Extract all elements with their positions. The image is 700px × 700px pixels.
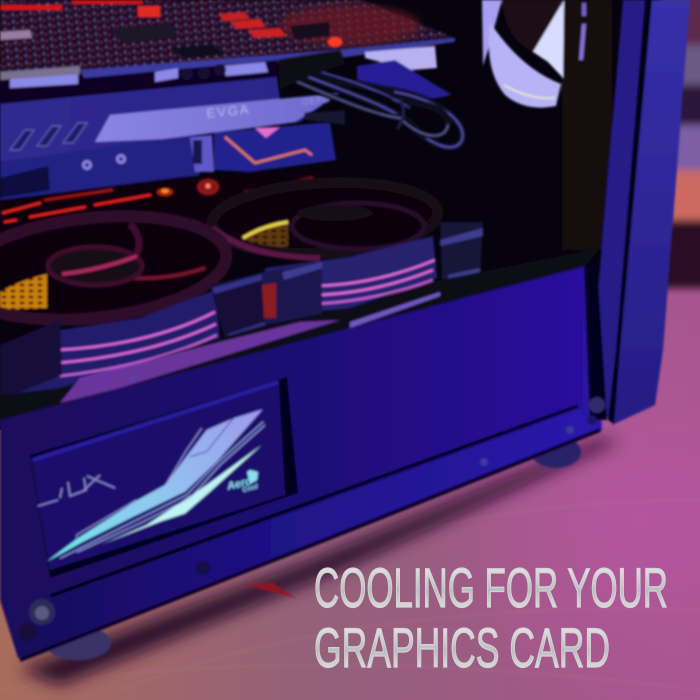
pillar gap (608, 0, 652, 424)
power supply cover panel (0, 266, 602, 658)
orange accent line (225, 137, 312, 163)
upper rear fan (482, 0, 564, 108)
EVGA logo: EVGA (206, 101, 251, 121)
rail underside (20, 430, 600, 660)
right fan blades (220, 178, 440, 258)
Aerocool logo: Aero (225, 475, 253, 493)
card edge and bracket parts (0, 38, 456, 104)
right pillar inner (592, 0, 645, 420)
red glow lights (0, 170, 340, 250)
rear foot (531, 436, 581, 468)
left fan blades (0, 204, 231, 332)
red shadow on wood (246, 583, 296, 598)
Aerocool logo (225, 470, 260, 494)
right fan hub (292, 203, 424, 249)
left fan pink stripes (58, 312, 217, 376)
shroud vent slots (10, 123, 87, 150)
left fan yellow hub glow (0, 274, 47, 310)
right pillar outer (612, 0, 690, 425)
screws (19, 374, 605, 641)
shroud silver strip (95, 93, 340, 142)
shelf above power supply cover (0, 248, 600, 420)
case interior (0, 0, 650, 430)
power supply light graphic (47, 409, 265, 562)
Aerocool logo: Cool (242, 483, 260, 494)
power supply face (32, 383, 285, 570)
right fan cylinder (265, 236, 437, 318)
left fan (0, 204, 322, 395)
center clip with red stripes (262, 262, 322, 325)
GEFORCE label: GEFO (301, 94, 332, 107)
right fan clip (440, 222, 483, 282)
left fan cylinder (0, 290, 220, 395)
power connector (278, 50, 345, 90)
graphics card circuit board (0, 0, 455, 78)
right fan pink stripes (265, 260, 435, 304)
right fan yellow hub glow (242, 222, 288, 250)
lower board and backplate (0, 122, 336, 205)
headline (314, 556, 668, 679)
bottom rail (14, 410, 600, 658)
front foot (45, 626, 111, 660)
power supply window (30, 377, 298, 578)
shelf lilac reflection (60, 320, 340, 403)
shadow under case (20, 440, 620, 685)
left fan hub (48, 247, 142, 285)
power connector clip (305, 110, 345, 125)
pillar shadow (584, 262, 607, 420)
right fan (210, 177, 483, 318)
graphics card shroud (0, 77, 340, 162)
rear mesh frame (562, 0, 612, 250)
right fan ring (210, 177, 440, 259)
background behind case, right edge (660, 0, 700, 288)
left fan clip (0, 272, 266, 395)
rail shadow line (50, 406, 578, 596)
wooden table surface (0, 280, 700, 700)
LUX logo (38, 475, 115, 506)
cables (278, 50, 463, 147)
pink triangle accent (255, 127, 280, 138)
left fan ring (0, 204, 231, 332)
